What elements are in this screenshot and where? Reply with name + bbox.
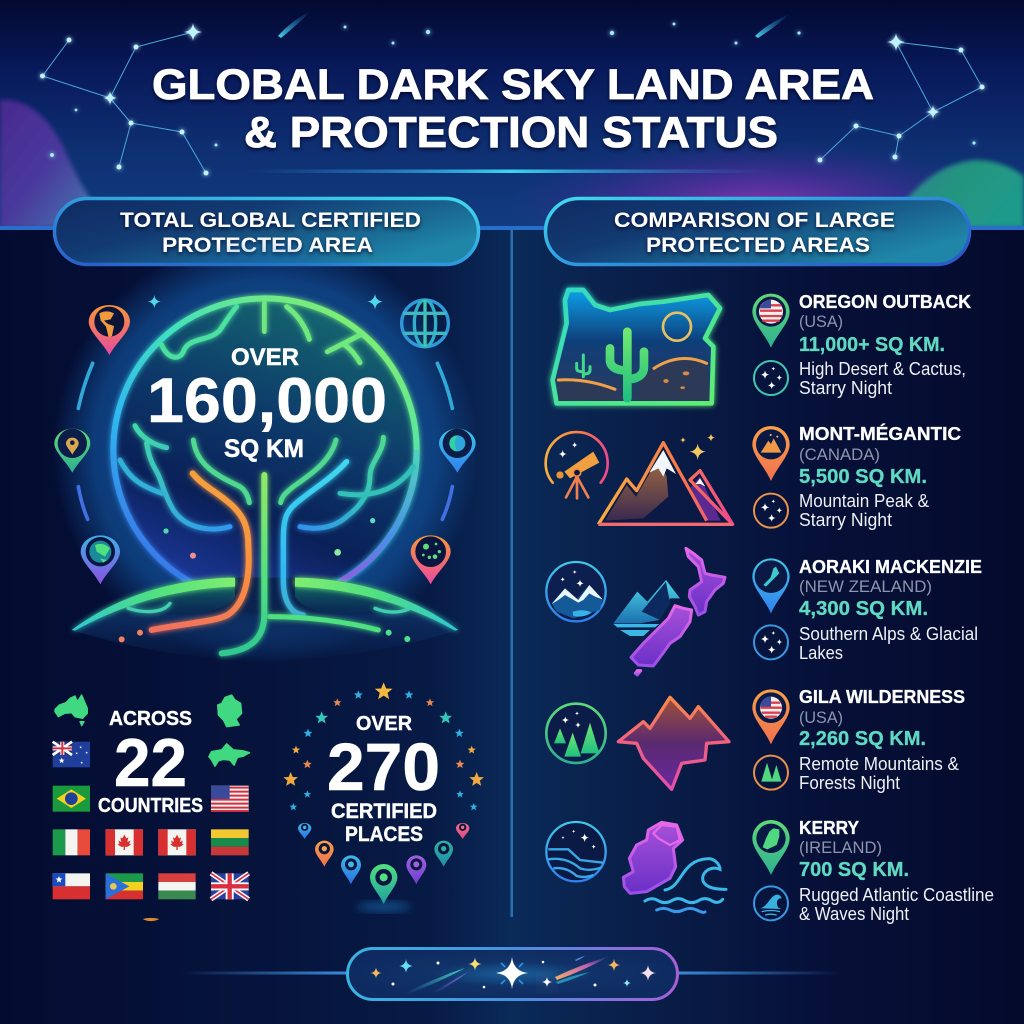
name: KERRY [799, 818, 859, 838]
icon: globe pin top left [89, 305, 130, 355]
name: AORAKI MACKENZIE [799, 557, 982, 577]
description: Starry Night [799, 378, 892, 398]
description: Southern Alps & Glacial [799, 624, 978, 644]
panel heading: total global certified protected area [54, 198, 478, 264]
flag: hungary [158, 873, 196, 899]
total area figure text: SQ KM [224, 435, 304, 463]
hills [558, 359, 707, 389]
panel: mont-megantic illustration [546, 432, 733, 524]
flag: australia [53, 742, 90, 767]
country: (NEW ZEALAND) [799, 577, 932, 596]
icon: earth pin bottom left [81, 535, 120, 584]
icon: sphere pin right [439, 429, 476, 473]
countries count text: 22 [114, 725, 187, 801]
constellation: left [40, 23, 208, 176]
certified places text: CERTIFIED [331, 800, 437, 823]
comets right [555, 956, 610, 984]
title divider [245, 170, 775, 173]
flag: tricolour triangle [106, 873, 143, 899]
title: GLOBAL DARK SKY LAND AREA [152, 61, 874, 109]
panel heading: total global certified protected area: TOTAL GLOBAL CERTIFIED [120, 209, 421, 232]
certified places text: OVER [356, 713, 413, 735]
description [799, 754, 959, 793]
name: OREGON OUTBACK [799, 292, 971, 312]
total area figure text: OVER [231, 344, 299, 371]
icon: wave circle [754, 886, 788, 920]
icon: australia silhouette [55, 695, 87, 726]
icon: russia silhouette [209, 744, 249, 766]
moon [663, 313, 691, 341]
flag: italy [53, 829, 90, 855]
area value: 2,260 SQ KM. [799, 728, 926, 750]
panel: certified places star and pin ring [283, 682, 484, 911]
flag: canada second [158, 829, 196, 855]
footer starry pill [348, 948, 678, 1000]
icon: ireland map [623, 822, 683, 893]
big cactus [610, 332, 644, 398]
title [152, 61, 874, 157]
panel: gila wilderness illustration [546, 697, 729, 789]
icon: islands pin bottom right [411, 535, 451, 584]
area value: 4,300 SQ KM. [799, 598, 928, 620]
star ring [283, 682, 484, 810]
icon: mountain peaks [598, 434, 733, 524]
description [799, 359, 966, 398]
soil mound hiding globe base [72, 578, 458, 660]
icon: forest circle [546, 704, 606, 763]
description: Rugged Atlantic Coastline [799, 885, 994, 905]
icon: mountain lake [613, 580, 680, 636]
pin glow [357, 902, 410, 911]
panel heading: comparison of large protected areas: PROTECTED AREAS [646, 234, 870, 257]
small cactus [577, 355, 590, 377]
decorative dots [119, 518, 410, 642]
country: (USA) [799, 708, 843, 727]
footer rule: right [678, 972, 842, 974]
vertical column divider [510, 228, 513, 917]
small orange mark [143, 918, 159, 921]
ground pebbles [663, 371, 689, 389]
footer rule: left [180, 972, 346, 974]
flag: chile [53, 873, 90, 899]
icon: stars circle [754, 361, 788, 395]
tree branches and continents [120, 303, 413, 653]
description: High Desert & Cactus, [799, 359, 966, 379]
name: MONT-MÉGANTIC [799, 423, 961, 444]
icon: globe top right [402, 300, 448, 347]
country: (USA) [799, 312, 843, 331]
icon: stars circle [754, 494, 788, 528]
country: (IRELAND) [799, 838, 882, 857]
description [799, 885, 994, 924]
icon: stars circle [754, 625, 788, 659]
name: GILA WILDERNESS [799, 687, 965, 707]
description [799, 624, 978, 663]
panel heading: comparison of large protected areas: COMPARISON OF LARGE [614, 209, 895, 232]
pin: new zealand [752, 558, 790, 613]
description: Starry Night [799, 510, 892, 530]
oregon state outline [553, 290, 720, 403]
panel heading: total global certified protected area: PROTECTED AREA [162, 234, 373, 257]
pin: usa flag [752, 294, 790, 348]
panel: kerry details [752, 818, 994, 924]
flag: lithuania [211, 829, 249, 855]
pin arc [298, 823, 469, 904]
icon: alps circle [546, 562, 606, 621]
panel: aoraki mackenzie details [752, 557, 982, 663]
panel: oregon outback details [752, 292, 971, 398]
constellation: right [818, 33, 984, 162]
sparkles [370, 957, 656, 989]
icon: new zealand map [631, 548, 725, 675]
countries count text: ACROSS [109, 708, 192, 730]
ground fill [558, 359, 709, 401]
pin: ireland [752, 820, 790, 875]
area value: 5,500 SQ KM. [799, 466, 927, 488]
country: (CANADA) [799, 445, 880, 464]
icon: telescope [546, 432, 608, 498]
description: & Waves Night [799, 904, 909, 924]
orbit arcs [78, 363, 452, 519]
comets left [405, 968, 468, 994]
panel: total area tree globe illustration [52, 237, 478, 663]
description: Forests Night [799, 773, 900, 793]
certified places text: 270 [327, 730, 440, 805]
certified places text: PLACES [345, 823, 423, 846]
soil under left arc [127, 585, 235, 613]
panel: aoraki mackenzie illustration [546, 548, 725, 675]
background stars and comets [50, 10, 976, 157]
flag: united kingdom [211, 873, 249, 899]
description: Lakes [799, 643, 843, 663]
description: Remote Mountains & [799, 754, 959, 774]
description [799, 491, 929, 530]
panel: mont-megantic details [752, 423, 961, 530]
panel: gila wilderness details [752, 687, 965, 793]
panel: country flags and count [53, 695, 249, 921]
ground arcs [72, 578, 458, 631]
header sky band [0, 0, 1024, 270]
certified places text [327, 713, 440, 846]
countries count text [98, 708, 203, 817]
globe ring [113, 298, 417, 602]
icon: map pin left [54, 429, 90, 473]
flag: canada [106, 829, 143, 855]
panel: kerry illustration [546, 822, 726, 912]
icon: coastline circle [546, 822, 606, 881]
total area figure text [147, 344, 387, 463]
description: Mountain Peak & [799, 491, 929, 511]
area value: 11,000+ SQ KM. [799, 334, 945, 356]
countries count text: COUNTRIES [98, 795, 203, 817]
icon: trees circle [754, 756, 788, 790]
icon: gila map mountains [618, 697, 729, 789]
icon: germany silhouette [218, 695, 242, 727]
soil under right arc [295, 585, 407, 613]
panel heading: comparison of large protected areas [546, 198, 970, 264]
panel: oregon outback illustration [553, 290, 720, 403]
title: & PROTECTION STATUS [244, 108, 778, 157]
globe halo [52, 237, 478, 663]
flag: brazil [53, 786, 90, 812]
sparkles [148, 294, 383, 310]
pin: usa flag [752, 689, 790, 744]
area value: 700 SQ KM. [799, 859, 909, 881]
icon: ocean wave [645, 859, 726, 912]
pin: mountain [752, 426, 790, 481]
total area figure text: 160,000 [147, 366, 387, 436]
flag: united states [211, 786, 249, 812]
